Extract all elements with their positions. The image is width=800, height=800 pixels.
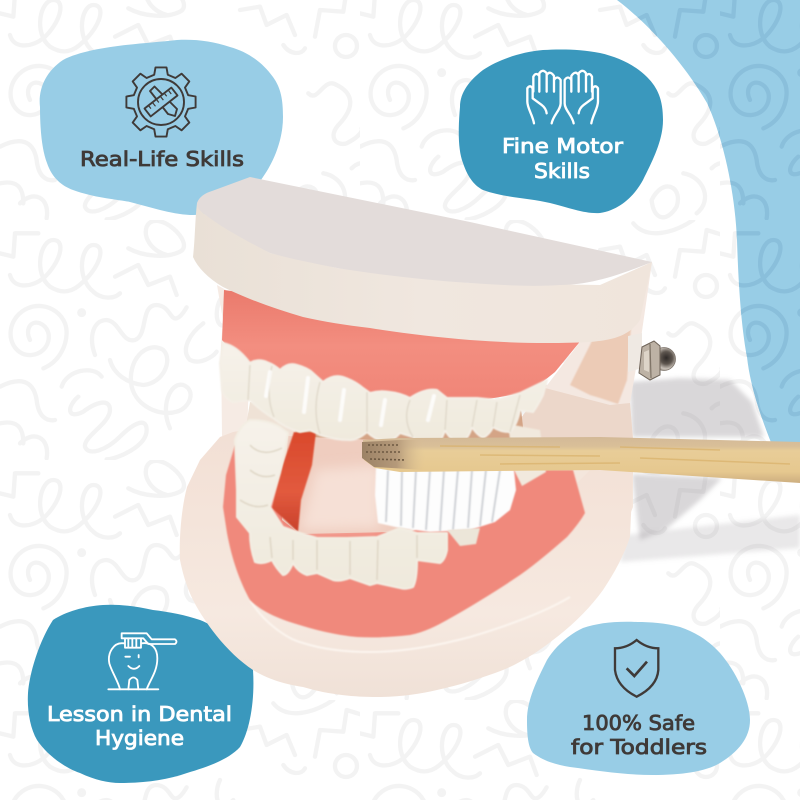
- mouth floor: [282, 436, 470, 534]
- icon: gear with ruler and pencil: [126, 67, 196, 137]
- label: 100% safe for toddlers: for Toddlers: [571, 735, 707, 759]
- label: fine motor skills: Fine Motor: [502, 134, 624, 158]
- mouth interior backing: [245, 402, 290, 432]
- toothbrush bristles: [375, 467, 516, 532]
- cast shadows: [620, 378, 800, 562]
- label: lesson in dental hygiene: [47, 702, 232, 750]
- label: lesson in dental hygiene: Hygiene: [95, 726, 184, 750]
- upper gum: [222, 290, 583, 402]
- lower tray: [180, 420, 633, 697]
- panel: lesson in dental hygiene: [28, 605, 253, 783]
- panel: real-life skills: [40, 40, 283, 215]
- upper hinge block: [545, 262, 652, 405]
- panel: 100% safe for toddlers: [527, 622, 750, 775]
- label: 100% safe for toddlers: [571, 711, 707, 759]
- icon: smiling tooth with brush: [108, 633, 176, 689]
- nut and bolt: [628, 333, 676, 380]
- label: fine motor skills: Skills: [534, 159, 590, 183]
- illustration: dental model: [180, 177, 800, 697]
- label: fine motor skills: [502, 134, 624, 183]
- top-right blue shape: [600, 0, 800, 445]
- icon: open hands: [527, 71, 598, 123]
- icon: shield with check: [615, 640, 658, 697]
- inner red gum: [272, 432, 316, 532]
- panel: fine motor skills: [459, 49, 663, 213]
- lower back tooth: [508, 424, 546, 486]
- rear post: [217, 285, 250, 436]
- label: lesson in dental hygiene: Lesson in Dental: [47, 702, 232, 726]
- upper teeth: [220, 343, 547, 447]
- lower gum: [223, 445, 585, 637]
- label: 100% safe for toddlers: 100% Safe: [582, 711, 695, 735]
- label: real-life skills: Real-Life Skills: [80, 147, 244, 171]
- lower tray rim highlight: [250, 597, 570, 652]
- lower teeth: [235, 420, 447, 589]
- upper plate: [193, 177, 652, 343]
- right hinge lower block: [505, 385, 633, 560]
- toothbrush handle: [362, 437, 800, 483]
